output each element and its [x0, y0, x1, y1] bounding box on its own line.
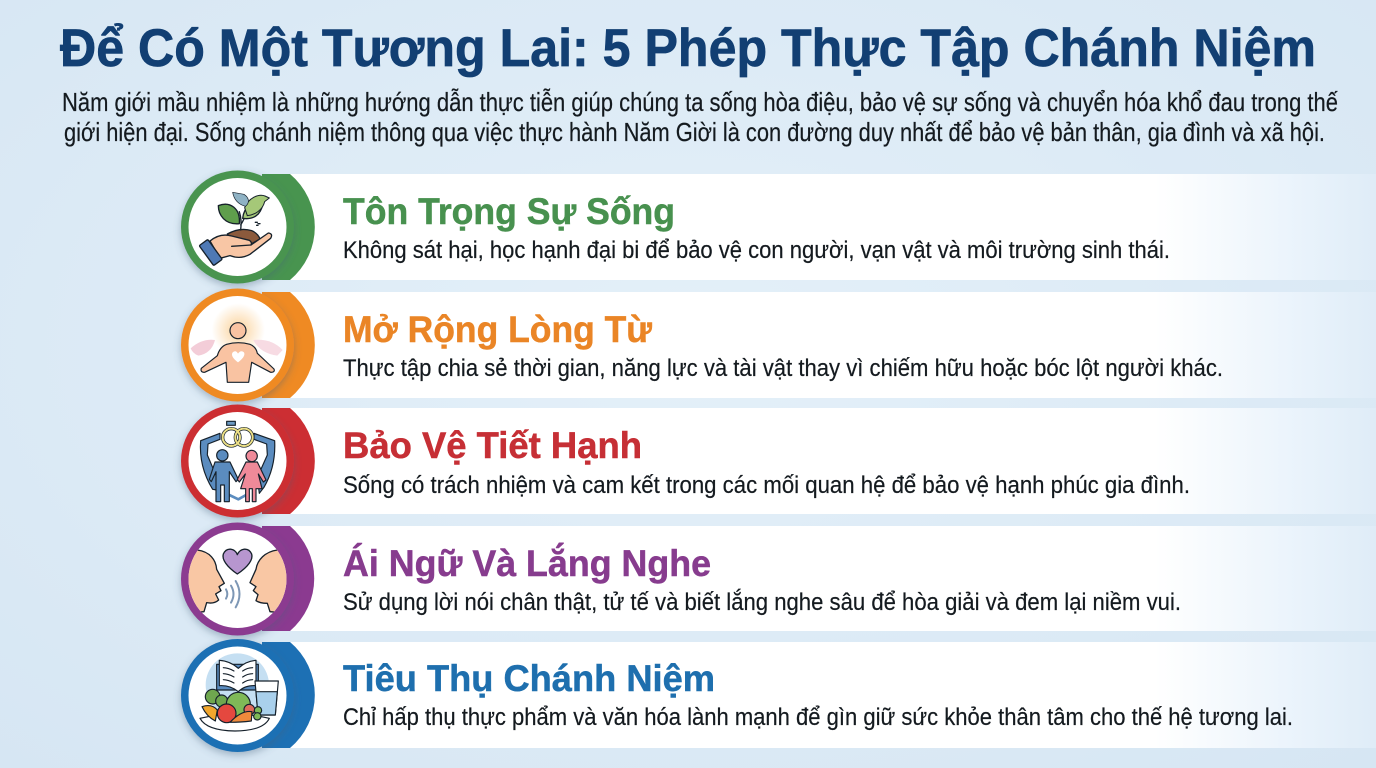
description: Sống có trách nhiệm và cam kết trong các mối quan hệ để bảo vệ hạnh phúc gia đình.: [343, 472, 1190, 499]
heading: Ái Ngữ Và Lắng Nghe: Ái Ngữ Và Lắng Nghe: [343, 542, 711, 584]
panel: Ái Ngữ Và Lắng Nghe: [181, 522, 1376, 636]
heading: Bảo Vệ Tiết Hạnh: Bảo Vệ Tiết Hạnh: [343, 425, 642, 466]
icon: couple, rings and shield: [200, 421, 275, 502]
heading: Mở Rộng Lòng Từ: Mở Rộng Lòng Từ: [343, 309, 652, 350]
panel: Tiêu Thụ Chánh Niệm: [181, 639, 1376, 752]
icon: person with open heart: [191, 303, 283, 382]
description: Không sát hại, học hạnh đại bi để bảo vệ con người, vạn vật và môi trường sinh thái.: [343, 237, 1170, 264]
intro text: [62, 87, 1338, 147]
title: Để Có Một Tương Lai: 5 Phép Thực Tập Chánh Niệm: [60, 19, 1316, 78]
description: Sử dụng lời nói chân thật, tử tế và biết lắng nghe sâu để hòa giải và đem lại niềm vui.: [343, 589, 1181, 616]
description: Chỉ hấp thụ thực phẩm và văn hóa lành mạnh để gìn giữ sức khỏe thân tâm cho thế hệ tương lai.: [343, 704, 1293, 731]
heading: Tôn Trọng Sự Sống: Tôn Trọng Sự Sống: [343, 191, 675, 232]
icon: two faces with heart and sound waves: [183, 549, 290, 613]
heading: Tiêu Thụ Chánh Niệm: Tiêu Thụ Chánh Niệm: [343, 658, 715, 699]
panel: Tôn Trọng Sự Sống: [181, 170, 1376, 284]
icon: book, water and healthy food: [200, 653, 278, 731]
panel: Bảo Vệ Tiết Hạnh: [181, 404, 1376, 518]
icon: hand holding seedling: [199, 192, 272, 266]
panel: Mở Rộng Lòng Từ: [181, 288, 1376, 402]
description: Thực tập chia sẻ thời gian, năng lực và tài vật thay vì chiếm hữu hoặc bóc lột người khác.: [343, 355, 1223, 382]
